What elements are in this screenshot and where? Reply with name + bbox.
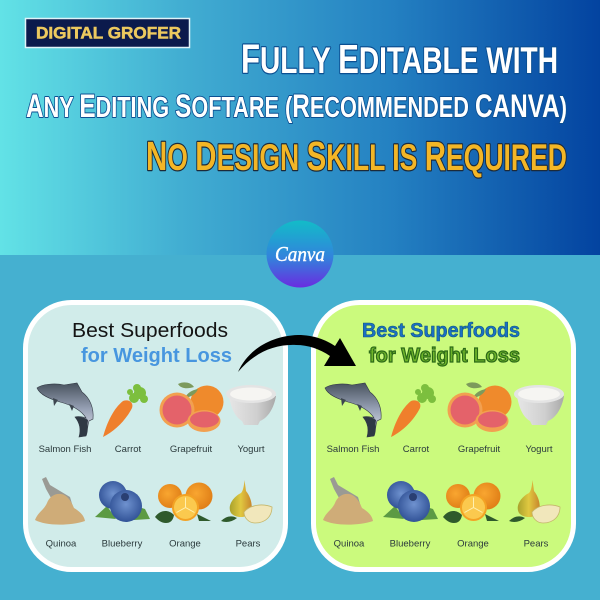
icon: Canva logo xyxy=(266,220,334,288)
food labels xyxy=(39,444,265,550)
icon: Canva logo: Canva xyxy=(275,242,325,266)
logo: Digital Grofer: DIGITAL GROFER xyxy=(36,24,181,42)
panel title: Best Superfoods xyxy=(72,319,228,342)
panel: edited version xyxy=(314,302,574,570)
arrow: from original to edited xyxy=(238,335,356,372)
panel title xyxy=(72,319,232,367)
panel title: Best Superfoods xyxy=(362,319,520,342)
food icons xyxy=(35,382,276,525)
heading: Any Editing Softare (Recommended CANVA): ANY EDITING SOFTARE (RECOMMENDED CANVA) xyxy=(26,88,567,124)
panel title xyxy=(362,319,520,367)
logo: Digital Grofer xyxy=(26,18,190,48)
background: top gradient banner xyxy=(0,0,600,255)
background: lower blue band xyxy=(0,255,600,600)
panel title: for Weight Loss xyxy=(369,344,520,367)
food icons xyxy=(323,382,564,525)
panel: original version xyxy=(26,302,286,570)
food labels xyxy=(327,444,553,550)
panel title: for Weight Loss xyxy=(81,344,232,367)
